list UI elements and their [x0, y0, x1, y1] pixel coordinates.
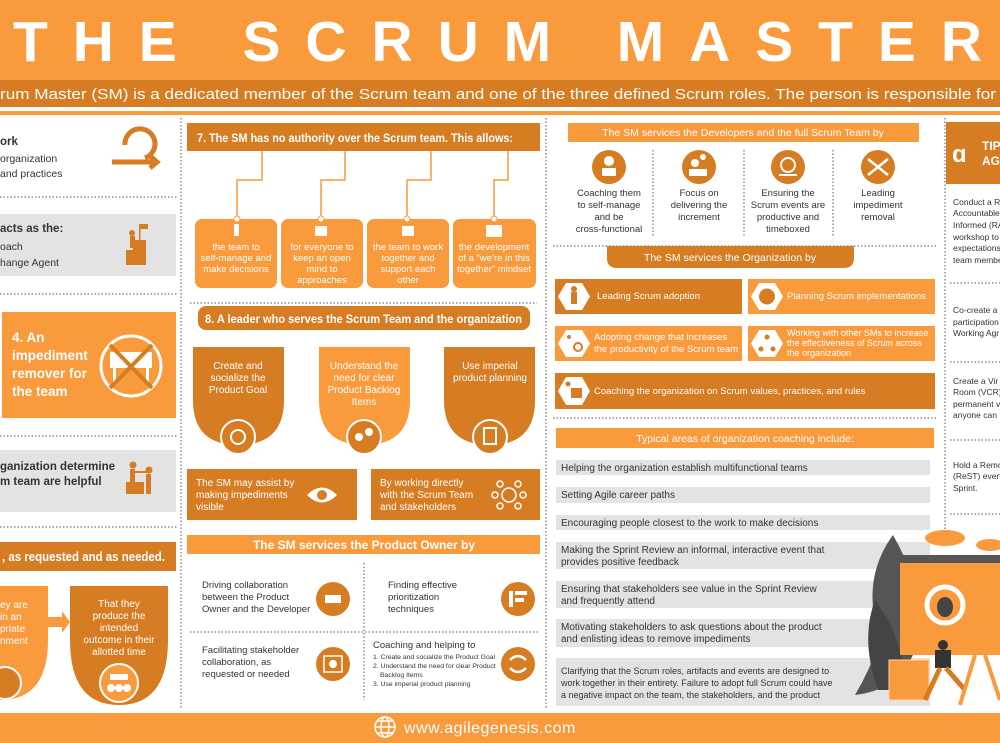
box: open mind: for everyone to — [290, 242, 354, 253]
list: coaching areas: Making the Sprint Review an informal, interactive event that — [561, 545, 825, 556]
org item: coaching values — [555, 373, 935, 409]
box: together mindset: of a “we’re in this — [458, 253, 530, 264]
tip: working agreement: Working Agr — [953, 328, 999, 338]
heading: 8 leader — [198, 306, 530, 330]
panel: acts as the: acts as the: — [0, 223, 63, 235]
heading: product owner: The SM services the Product Owner by — [253, 538, 475, 552]
panel: organization determine: m team are helpful — [0, 476, 102, 488]
shield: backlog items — [319, 347, 410, 454]
shield: product goal: Create and — [213, 361, 263, 372]
icon: network — [492, 481, 526, 509]
heading: product owner — [187, 535, 540, 554]
box: together mindset: the development — [459, 242, 529, 253]
box: impediments visible: The SM may assist by — [196, 478, 294, 489]
item: coaching self-manage: to self-manage — [578, 200, 640, 211]
shield: appropriate environment: priate — [0, 624, 25, 635]
shield: backlog items: Items — [352, 397, 376, 408]
org item: adopting change — [555, 326, 742, 361]
shield: intended outcome: outcome in their — [83, 635, 155, 646]
list: coaching areas: provides positive feedback — [561, 557, 680, 568]
shield: product planning: product planning — [453, 373, 527, 384]
item: facilitating stakeholder: collaboration, as — [202, 657, 271, 668]
tip: RACI: expectations — [953, 243, 1000, 253]
tip: virtual room: permanent v — [953, 399, 1000, 409]
tip: virtual room — [953, 376, 1000, 420]
list: coaching areas: work together in their entirety. Failure to adopt full Scrum could have — [560, 678, 832, 688]
item: increment: delivering the — [671, 200, 727, 211]
item: coaching and helping: 3. Use imperial product planning — [373, 681, 471, 688]
item: increment — [671, 150, 727, 223]
shield: product planning — [444, 347, 535, 454]
org item: working with other SMs: the effectiveness of Scrum across — [787, 338, 922, 348]
list: coaching areas: Setting Agile career paths — [561, 490, 675, 501]
item: impediment removal — [853, 150, 903, 223]
panel: organization determine: ganization determine — [0, 461, 115, 473]
list: coaching areas: Clarifying that the Scrum roles, artifacts and events are designed to — [561, 666, 829, 676]
panel: left framework: and practices — [0, 168, 62, 180]
box: open mind: mind to — [306, 264, 338, 275]
panel: impediment remover: the team — [12, 384, 68, 399]
item: prioritization: techniques — [388, 604, 434, 615]
item: events timeboxed: Scrum events are — [751, 200, 825, 211]
tip: RACI: Conduct a R — [953, 197, 1000, 207]
item: coaching self-manage — [576, 150, 642, 235]
box: working directly: with the Scrum Team — [379, 490, 473, 501]
shield: product goal: socialize the — [210, 373, 266, 384]
tip: ReST event — [953, 460, 1000, 493]
item: impediment removal: removal — [861, 212, 895, 223]
item: events timeboxed — [751, 150, 825, 235]
heading: 8 leader: 8. A leader who serves the Scrum Team and the organization — [205, 312, 522, 326]
box: self-manage: self-manage and — [201, 253, 271, 264]
box: impediments visible: visible — [196, 502, 224, 513]
box: self-manage: make decisions — [203, 264, 269, 275]
shield: intended outcome — [70, 586, 168, 705]
box: work together: support each — [381, 264, 435, 275]
panel: organization determine — [0, 450, 176, 512]
org item: leading adoption: Leading Scrum adoption — [597, 291, 700, 302]
list: coaching areas: Helping the organization establish multifunctional teams — [561, 463, 808, 474]
shield: appropriate environment: ey are — [0, 600, 28, 611]
heading: 7 no authority: 7. The SM has no authority over the Scrum team. This allows: — [197, 131, 513, 145]
tip: working agreement — [953, 305, 999, 338]
org item: working with other SMs: the organization — [787, 348, 851, 358]
item: driving collaboration: Owner and the Developer — [202, 604, 310, 615]
heading: organization: The SM services the Organization by — [644, 252, 817, 264]
icon: helping hand — [126, 462, 152, 494]
item: coaching and helping: 2. Understand the need for clear Product — [373, 663, 496, 670]
panel: impediment remover: remover for — [12, 366, 88, 381]
box: work together: the team to work — [373, 242, 443, 253]
panel: impediment remover: 4. An — [12, 330, 45, 345]
item: facilitating stakeholder: Facilitating stakeholder — [202, 645, 299, 656]
box: work together: other — [397, 275, 419, 286]
item: increment: Focus on — [679, 188, 719, 199]
tip: ReST event: Sprint. — [953, 483, 978, 493]
illustration: presenter with board — [855, 530, 1000, 705]
icon: gears — [100, 664, 138, 702]
tip: working agreement: Co-create a — [953, 305, 998, 315]
item: prioritization: Finding effective — [388, 580, 457, 591]
shield: appropriate environment: nment — [0, 636, 28, 647]
shield: product goal — [193, 347, 284, 454]
arrow — [48, 611, 70, 633]
panel: left framework: ork — [0, 136, 18, 148]
item: prioritization — [388, 580, 535, 616]
shield: intended outcome: produce the — [93, 611, 146, 622]
shield: intended outcome: intended — [100, 623, 138, 634]
icon: globe — [375, 717, 395, 737]
box: working directly: By working directly — [380, 478, 463, 489]
tip: RACI: Accountable — [953, 208, 1000, 218]
box: working directly — [371, 469, 540, 520]
org item: leading adoption — [555, 279, 742, 314]
item: prioritization: prioritization — [388, 592, 439, 603]
banner: as requested — [0, 542, 176, 571]
box: together mindset: together” mindset — [457, 264, 531, 275]
tip: virtual room: anyone can — [953, 410, 997, 420]
panel: acts as the — [0, 214, 176, 276]
item: driving collaboration: Driving collaboration — [202, 580, 288, 591]
list: coaching areas: and enlisting ideas to remove impediments — [561, 634, 751, 645]
box: working directly: and stakeholders — [380, 502, 456, 513]
panel: tips header: AG — [982, 154, 1000, 168]
item: events timeboxed: timeboxed — [766, 224, 810, 235]
heading: typical areas — [556, 428, 934, 448]
shield: appropriate environment: in an — [0, 612, 22, 623]
shield: product goal: Product Goal — [209, 385, 267, 396]
item: impediment removal: Leading — [861, 188, 895, 199]
icon: scrum cycle — [112, 129, 157, 168]
icon: climber — [126, 224, 148, 265]
tip: ReST event: (ReST) even — [953, 471, 1000, 481]
icon: eye — [307, 488, 337, 502]
tip: RACI — [952, 197, 1000, 265]
box: impediments visible — [187, 469, 357, 520]
org item: working with other SMs — [748, 326, 935, 361]
shield: appropriate environment — [0, 586, 48, 700]
shield: backlog items: need for clear — [333, 373, 395, 384]
box: impediments visible: making impediments — [196, 490, 288, 501]
org item: working with other SMs: Working with other SMs to increase — [787, 328, 928, 338]
heading: developers: The SM services the Developers and the full Scrum Team by — [602, 127, 885, 139]
tip: RACI: workshop to — [952, 232, 999, 242]
item: driving collaboration: between the Product — [202, 592, 290, 603]
subtitle band: rum Master (SM) is a dedicated member of the Scrum team and one of the three defined Scrum roles. The person is responsible for — [0, 86, 996, 103]
tip: working agreement: participation — [953, 317, 999, 327]
shield: intended outcome: That they — [98, 599, 140, 610]
footer: www.agilegenesis.com — [403, 720, 576, 737]
item: coaching self-manage: and be — [594, 212, 624, 223]
panel: impediment remover: impediment — [12, 348, 88, 363]
box: work together — [367, 216, 449, 288]
box: together mindset — [453, 216, 536, 288]
list: coaching areas: and frequently attend — [561, 596, 655, 607]
connectors — [237, 151, 508, 219]
item: events timeboxed: productive and — [757, 212, 819, 223]
org item: planning implementations: Planning Scrum implementations — [787, 291, 926, 302]
panel: left framework: organization — [0, 153, 57, 165]
header background — [0, 0, 1000, 80]
heading: organization — [607, 246, 854, 268]
item: coaching and helping: 1. Create and socialize the Product Goal — [373, 654, 496, 661]
list: coaching areas: Ensuring that stakeholders see value in the Sprint Review — [561, 584, 817, 595]
panel: acts as the: oach — [0, 241, 23, 253]
panel: tips header — [946, 122, 1000, 184]
item: increment: increment — [678, 212, 720, 223]
org item: coaching values: Coaching the organization on Scrum values, practices, and rules — [594, 386, 866, 397]
banner: as requested: , as requested and as needed. — [2, 550, 165, 564]
panel: impediment remover — [2, 312, 176, 418]
item: events timeboxed: Ensuring the — [761, 188, 815, 199]
item: driving collaboration — [202, 580, 350, 616]
footer — [0, 713, 1000, 743]
box: open mind: keep an open — [293, 253, 351, 264]
title: THE SCRUM MASTER — [13, 10, 982, 74]
list: coaching areas: Motivating stakeholders to ask questions about the product — [561, 622, 822, 633]
heading: developers — [568, 123, 919, 142]
tip: virtual room: Create a Vir — [953, 376, 998, 386]
box: self-manage: the team to — [212, 242, 260, 253]
item: coaching and helping — [373, 640, 535, 688]
list: coaching areas: a negative impact on the team, the stakeholders, and the product — [561, 690, 821, 700]
org item: adopting change: Adopting change that increases — [594, 332, 727, 343]
shield: intended outcome: allotted time — [92, 647, 146, 658]
org item: adopting change: the productivity of the Scrum team — [594, 344, 738, 355]
heading: typical areas: Typical areas of organization coaching include: — [636, 433, 854, 445]
shield: backlog items: Understand the — [330, 361, 399, 372]
item: coaching self-manage: Coaching them — [577, 188, 641, 199]
icon: barrier crossed — [101, 336, 161, 396]
shield: product planning: Use imperial — [462, 361, 518, 372]
box: open mind — [281, 216, 363, 288]
item: coaching and helping: Coaching and helping to — [373, 640, 475, 651]
list: coaching areas: Encouraging people closest to the work to make decisions — [561, 518, 818, 529]
item: coaching self-manage: cross-functional — [576, 224, 642, 235]
item: coaching and helping: Backlog Items — [380, 672, 423, 679]
shield: backlog items: Product Backlog — [328, 385, 400, 396]
box: open mind: approaches — [297, 275, 347, 286]
org item: planning implementations — [748, 279, 935, 314]
panel: acts as the: hange Agent — [0, 257, 59, 269]
box: self-manage — [195, 216, 277, 288]
subtitle band — [0, 80, 1000, 107]
panel: tips header: ɑ — [952, 141, 967, 168]
panel: left framework — [0, 129, 157, 180]
item: facilitating stakeholder: requested or needed — [202, 669, 290, 680]
heading: 7 no authority — [187, 123, 540, 151]
box: work together: together and — [381, 253, 435, 264]
item: facilitating stakeholder — [202, 645, 350, 681]
item: impediment removal: impediment — [853, 200, 903, 211]
list: coaching areas — [556, 460, 930, 706]
